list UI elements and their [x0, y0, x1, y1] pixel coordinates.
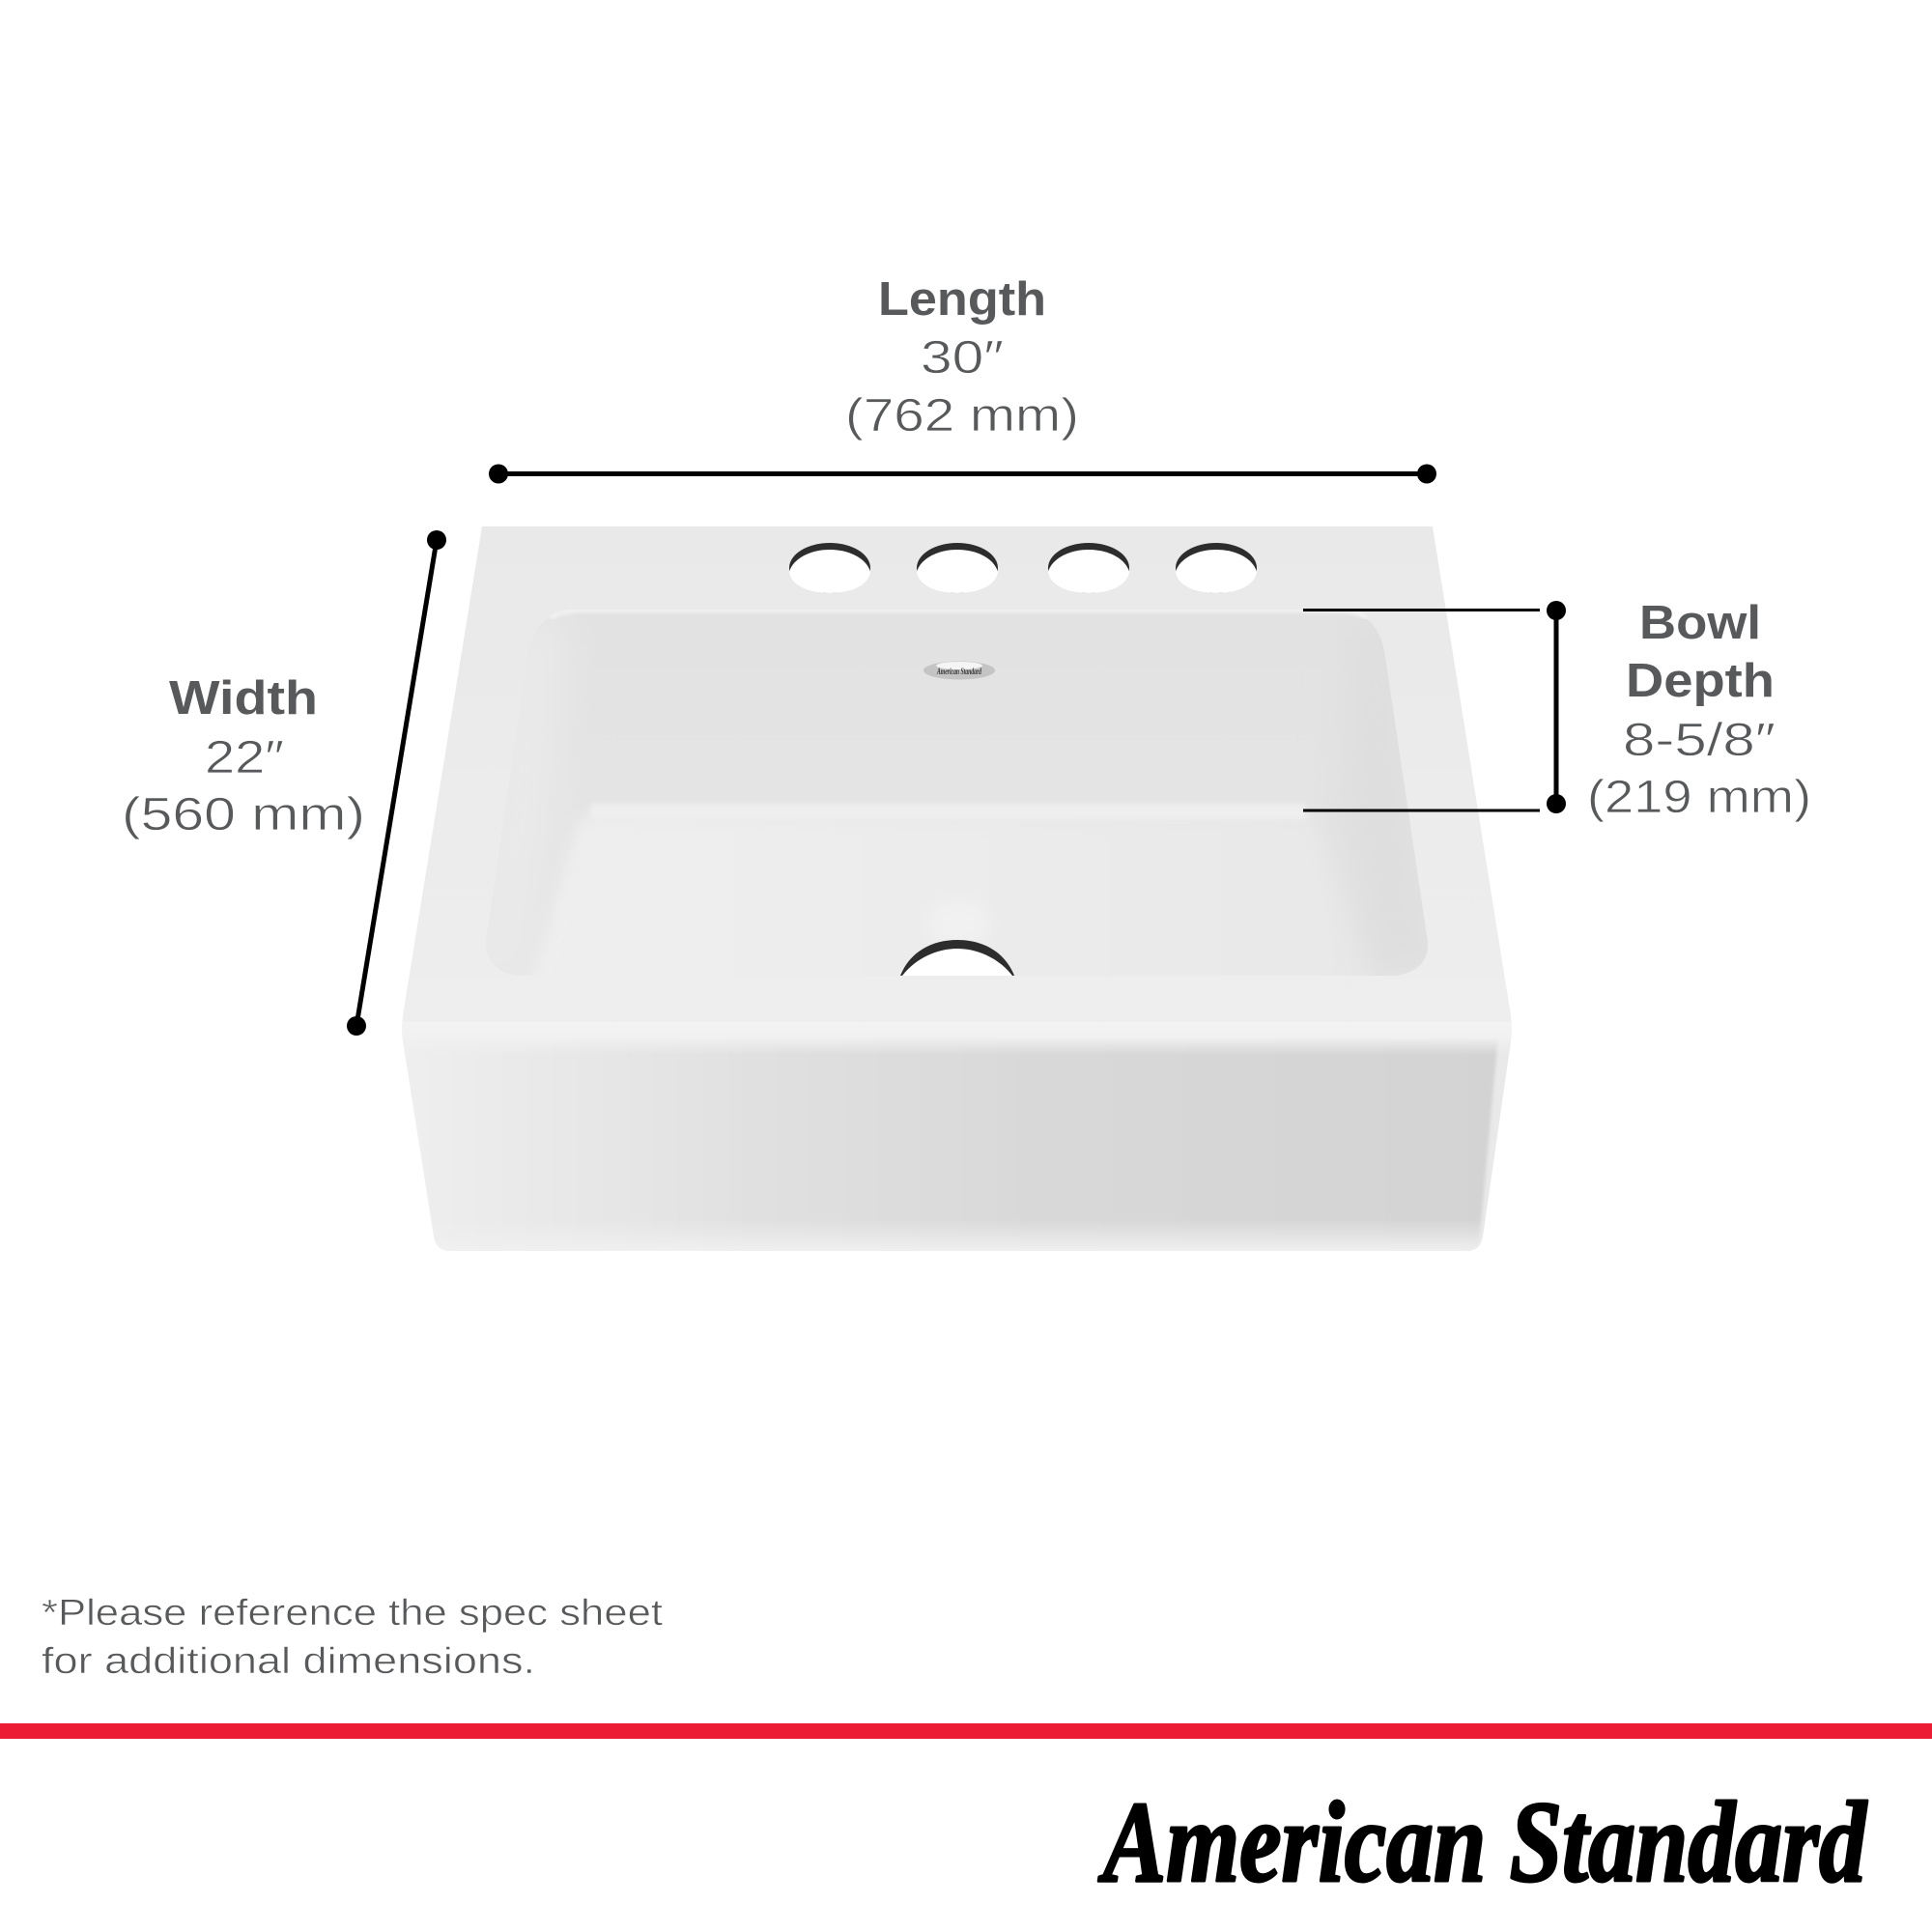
length label	[845, 273, 1079, 441]
drain glow	[927, 900, 989, 947]
right side face	[1468, 1034, 1517, 1256]
width label: 22″	[205, 732, 284, 783]
length label: 30″	[921, 332, 1004, 384]
faucet hole 4	[1176, 543, 1257, 593]
length label: (762 mm)	[845, 390, 1079, 441]
bowl depth dimension bracket	[1303, 601, 1566, 813]
faucet hole 1	[789, 543, 870, 593]
bowl floor	[543, 823, 860, 976]
sink illustration	[396, 526, 1517, 1256]
bowl depth label	[1587, 597, 1811, 823]
width label	[122, 672, 365, 840]
width label: (560 mm)	[122, 789, 365, 840]
right bowl wall shading	[1338, 618, 1439, 978]
left bowl wall	[473, 618, 565, 978]
bowl depth label: Depth	[1626, 655, 1775, 707]
footnote: for additional dimensions.	[42, 1641, 535, 1682]
length dimension line	[489, 464, 1436, 483]
bowl depth label: Bowl	[1639, 597, 1761, 649]
bowl top rim highlight	[551, 611, 1367, 618]
faucet hole 2	[917, 543, 998, 593]
overflow badge: American Standard	[936, 667, 981, 676]
bowl depth label: (219 mm)	[1587, 772, 1811, 823]
footnote: *Please reference the spec sheet	[42, 1593, 664, 1634]
width dimension line	[347, 530, 446, 1036]
width label: Width	[169, 672, 318, 724]
red divider bar	[0, 1723, 1932, 1739]
bowl back wall	[483, 609, 1430, 980]
faucet hole 3	[1048, 543, 1129, 593]
overflow badge	[923, 661, 995, 680]
apron bottom fade	[578, 1229, 1480, 1251]
front apron panel	[578, 1043, 1498, 1251]
drain opening	[900, 940, 1014, 976]
length label: Length	[878, 273, 1046, 326]
bowl floor crease highlight	[594, 806, 1304, 815]
footnote	[42, 1593, 664, 1682]
sink body outline and deck	[402, 526, 1512, 1251]
front rim highlight	[554, 1034, 1511, 1050]
bowl depth label: 8-5/8″	[1623, 715, 1776, 766]
bowl basin	[579, 614, 1428, 976]
